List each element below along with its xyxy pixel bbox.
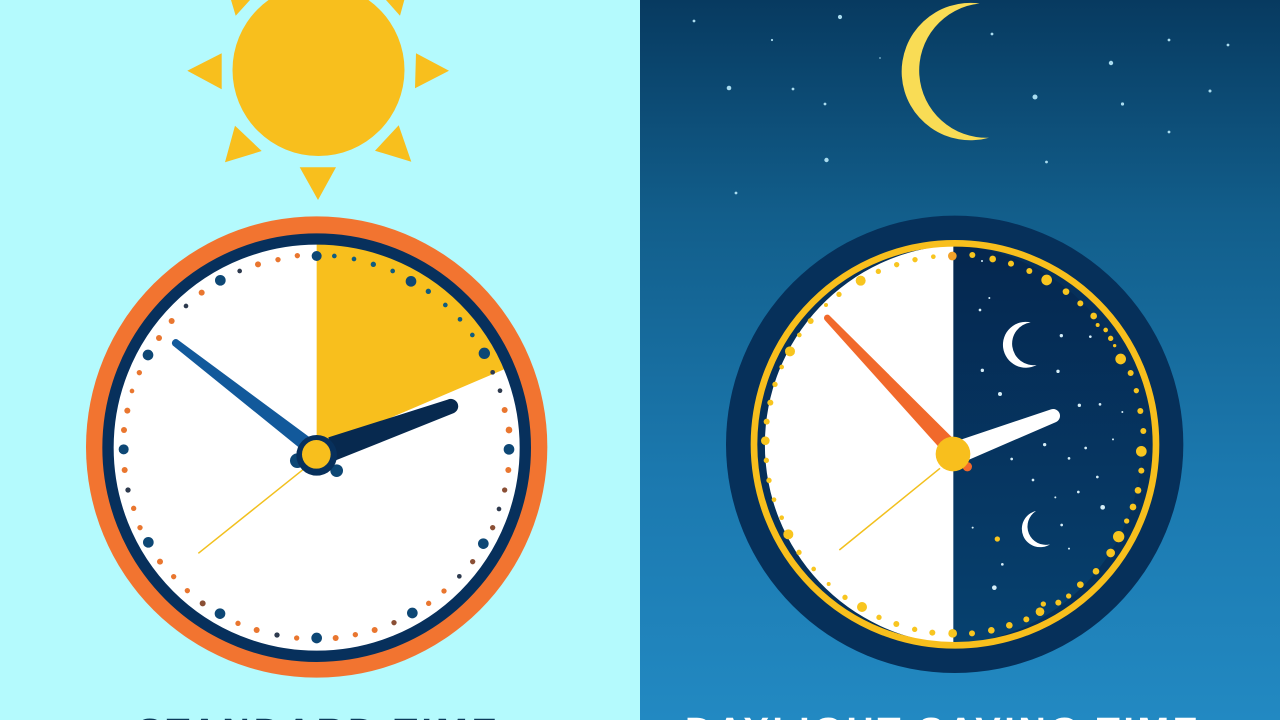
clock: daylight saving time (726, 216, 1183, 673)
clock white face (110, 241, 523, 654)
clock night half (953, 245, 1142, 644)
hour dots: yellow (761, 252, 1147, 638)
clock outer orange rim (86, 216, 547, 678)
panel background: night sky (640, 0, 1280, 720)
minute dots: brown (200, 487, 507, 625)
minute hand: blue (172, 339, 313, 452)
panel: standard time (0, 0, 640, 720)
clock: standard time (86, 216, 547, 678)
minute hand: orange (824, 315, 957, 451)
icon: small crescent upper (1003, 322, 1037, 368)
clock navy outer disc (726, 216, 1183, 673)
icon: sun (187, 0, 449, 200)
panel: daylight saving time (640, 0, 1280, 720)
clock hub (936, 437, 972, 471)
minute dots: dark (125, 269, 502, 638)
clock hub (290, 435, 343, 477)
hour dots: navy (119, 251, 514, 643)
hour hand: navy (328, 399, 458, 461)
yellow daylight wedge (317, 243, 504, 449)
minute dots: yellow (764, 252, 1146, 636)
clock navy ring (108, 239, 525, 656)
icon: crescent moon (902, 3, 989, 140)
clock yellow ring (754, 243, 1156, 645)
clock white day half (765, 245, 953, 644)
minute dots: teal on wedge (332, 254, 475, 337)
second hand (839, 468, 940, 550)
hour hand: white (962, 409, 1060, 460)
icon: small crescent lower (1022, 511, 1050, 547)
sky stars (693, 15, 1229, 194)
second hand (198, 467, 307, 553)
face stars (972, 260, 1123, 590)
minute dots: orange (121, 253, 512, 641)
panel background: light sky (0, 0, 640, 720)
